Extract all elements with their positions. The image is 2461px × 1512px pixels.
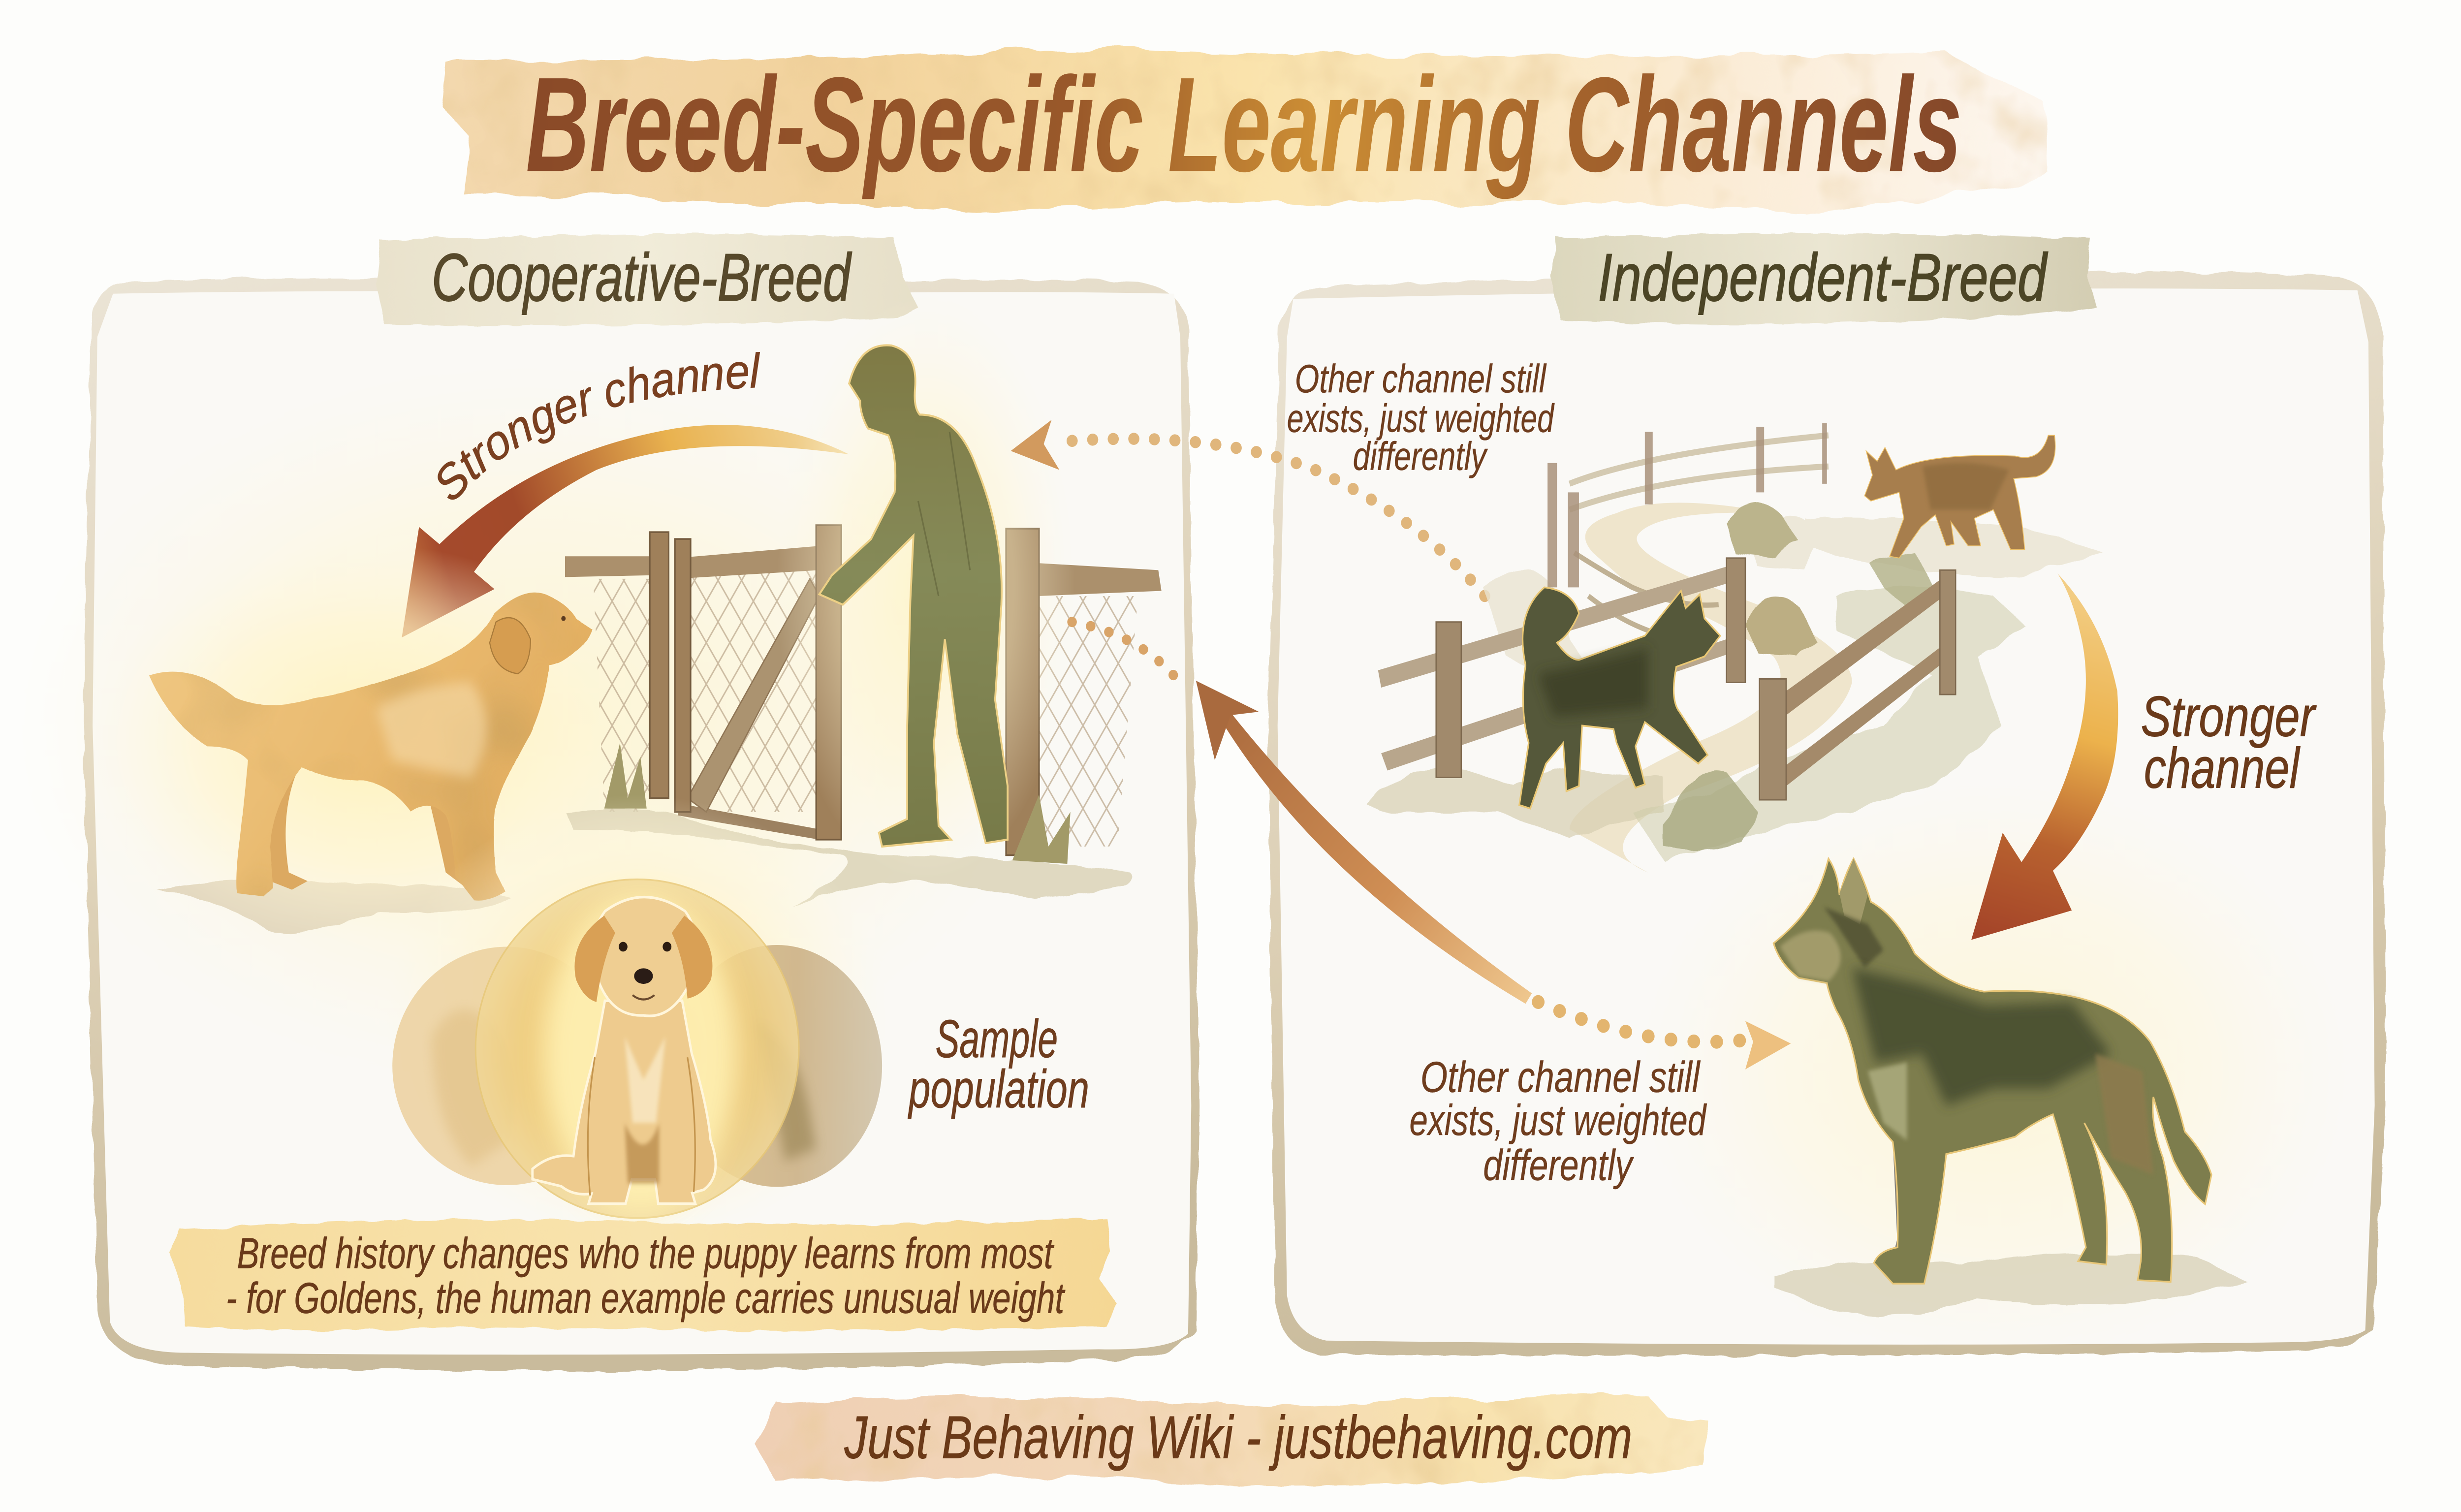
- callout text: [226, 1229, 1066, 1322]
- dog body: [1773, 858, 2211, 1284]
- label: stronger channel right: Stronger: [2141, 685, 2317, 748]
- ground shadow: large dog: [1773, 1254, 2247, 1316]
- label: stronger channel right: [2141, 685, 2317, 800]
- title banner: [440, 48, 2048, 213]
- dog fur highlights: [377, 682, 487, 778]
- heading: cooperative-breed: Cooperative-Breed: [432, 240, 852, 315]
- illustration: large independent dog: [1773, 858, 2211, 1284]
- callout text: - for Goldens, the human example carries unusual weight: [226, 1274, 1066, 1322]
- annotation: other channel top: Other channel still: [1295, 357, 1546, 401]
- ground shadows under near dog: [1365, 767, 1664, 838]
- chain-link mesh: [593, 562, 1138, 847]
- far legs: [1874, 1114, 2106, 1275]
- illustration: dark dog near fence: [1519, 587, 1720, 809]
- label: stronger channel right: channel: [2144, 737, 2301, 800]
- circle: central highlighted: [475, 880, 799, 1218]
- label: sample population: population: [908, 1060, 1089, 1119]
- tab: cooperative-breed: [377, 234, 918, 326]
- illustration: winding path landscape: [1365, 423, 2103, 873]
- gate rails: [565, 546, 1162, 596]
- callout banner: breed history: [169, 1218, 1117, 1330]
- label: stronger channel on left arrow: Stronger channel: [438, 352, 760, 500]
- circle: right population: [672, 945, 882, 1187]
- arrowhead: [1196, 681, 1259, 760]
- footer banner: [754, 1396, 1707, 1486]
- long arrow: independent dog to cooperative panel: [1196, 681, 1791, 1070]
- warm glow behind dog and man: [16, 363, 1051, 1088]
- label: sample population: Sample: [936, 1009, 1058, 1069]
- lighter chest and haunch: [1868, 1063, 1907, 1140]
- puppy head: [595, 898, 695, 1014]
- dog body: [149, 593, 592, 900]
- circle: left population: [392, 947, 622, 1185]
- illustration: brown dog on path: [1864, 436, 2055, 558]
- footer text: Just Behaving Wiki - justbehaving.com: [844, 1404, 1632, 1471]
- callout text: Breed history changes who the puppy learns from most: [237, 1229, 1055, 1277]
- dog ear: [490, 618, 531, 674]
- back fence: [1570, 436, 1829, 509]
- dotted connector from man's fence: [1072, 622, 1183, 688]
- arrow: stronger channel to independent dog: [1971, 573, 2118, 940]
- dark saddle markings: [1852, 968, 2111, 1105]
- grass tufts: [604, 743, 1071, 864]
- arrow: stronger channel to golden retriever: [402, 425, 849, 637]
- puppy body: [534, 1002, 715, 1202]
- tab: independent-breed: [1551, 233, 2097, 324]
- ground wash: [1483, 516, 2103, 708]
- annotation: other channel top: [1287, 357, 1555, 479]
- arrowhead: [1011, 420, 1059, 470]
- gate frame: [678, 803, 820, 840]
- olive grass: [1632, 586, 2025, 860]
- title: Breed-Specific Learning Channels: [526, 49, 1962, 200]
- label: sample population: [908, 1009, 1089, 1119]
- annotation: other channel bottom: differently: [1483, 1141, 1635, 1189]
- annotation: other channel bottom: exists, just weighted: [1410, 1096, 1707, 1144]
- ground shadow: gate: [565, 809, 1132, 907]
- dog face and ear details: [1839, 858, 1868, 924]
- ground shadow: golden retriever: [157, 880, 512, 933]
- puppy ears: [574, 915, 712, 1002]
- illustration: adult golden retriever: [94, 544, 643, 942]
- dotted arrow: other channel to man: [1011, 420, 1485, 596]
- arrowhead: [1745, 1021, 1791, 1070]
- path bands: [1570, 503, 1852, 873]
- panel: cooperative-breed: [16, 278, 1199, 1371]
- annotation: other channel top: exists, just weighted: [1287, 396, 1555, 441]
- heading: independent-breed: Independent-Breed: [1598, 240, 2049, 315]
- dog far legs: [267, 769, 490, 891]
- rocks: [1727, 503, 1797, 556]
- puppy face: [619, 942, 628, 951]
- fence posts: [650, 525, 1039, 855]
- annotation: other channel bottom: Other channel still: [1420, 1053, 1701, 1101]
- annotation: other channel top: differently: [1353, 435, 1488, 479]
- annotation: other channel bottom: [1410, 1053, 1707, 1189]
- illustration: wooden gate and chain-link fence: [565, 525, 1162, 907]
- warm glow behind large dog: [1632, 778, 2354, 1365]
- near fence: [1378, 567, 1731, 770]
- panel: independent-breed: [1268, 271, 2386, 1365]
- dotted tail: [1538, 1002, 1745, 1042]
- illustration: sample population and puppy: [386, 795, 888, 1244]
- illustration: man silhouette reaching for gate: [777, 294, 1075, 881]
